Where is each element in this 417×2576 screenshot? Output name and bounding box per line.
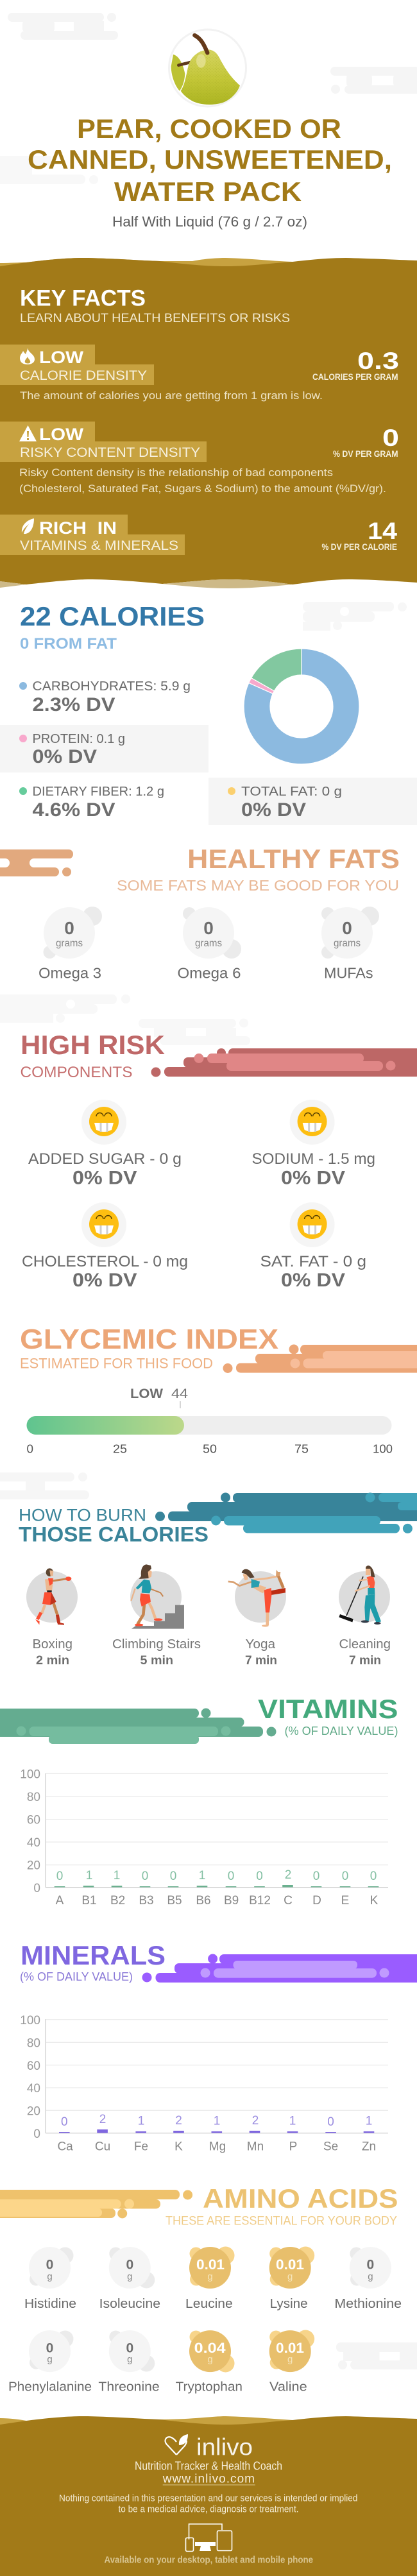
bar chart: minerals: 1 xyxy=(214,2115,220,2128)
icon: woman on stairs xyxy=(131,1564,184,1629)
stat: omega 3 xyxy=(38,907,102,982)
bar chart: vitamins: 40 xyxy=(27,1836,40,1850)
stat: omega 6: grams xyxy=(195,938,222,949)
activity: climbing stairs xyxy=(112,1564,201,1668)
bar chart: minerals: Fe xyxy=(134,2140,148,2154)
item: added sugar: ADDED SUGAR - 0 g xyxy=(28,1150,182,1168)
item: saturated fat xyxy=(260,1202,366,1291)
bar chart: minerals: 2 xyxy=(252,2114,259,2128)
subheading: SOME FATS MAY BE GOOD FOR YOU xyxy=(117,877,399,894)
decorative bars xyxy=(0,849,83,876)
amino: leucine: g xyxy=(207,2271,213,2282)
item: saturated fat: SAT. FAT - 0 g xyxy=(260,1253,366,1270)
stat: mufas: grams xyxy=(334,938,361,949)
bar chart: minerals: Se xyxy=(323,2140,338,2154)
activity: yoga: Yoga xyxy=(245,1637,276,1651)
text: calorie density note: The amount of calories you are getting from 1 gram is low. xyxy=(20,390,323,402)
bar chart: vitamins: 1 xyxy=(114,1869,120,1882)
activity: cleaning: Cleaning xyxy=(339,1637,391,1651)
panel: footer xyxy=(0,2416,417,2576)
panel: calories xyxy=(0,601,417,825)
gauge scale: 50 xyxy=(203,1442,217,1455)
icon: leaf xyxy=(22,518,34,534)
amino: lysine: g xyxy=(287,2271,293,2282)
bar chart: minerals: 40 xyxy=(27,2082,40,2095)
bar chart: vitamins: E xyxy=(341,1894,349,1907)
panel: vitamins xyxy=(0,1694,398,1907)
stat: mufas: MUFAs xyxy=(324,965,373,982)
amino: leucine: 0.01 xyxy=(196,2256,225,2273)
legend: carbohydrates xyxy=(19,679,191,715)
item: saturated fat: 0% DV xyxy=(281,1270,345,1291)
value: calories per gram xyxy=(312,348,399,382)
gauge marker: low 44: LOW xyxy=(130,1386,163,1401)
amino: leucine xyxy=(185,2247,235,2311)
amino: phenylalanine: g xyxy=(47,2354,53,2365)
bar chart: vitamins: 0 xyxy=(142,1870,148,1883)
heading: amino acids: AMINO ACIDS xyxy=(203,2183,398,2213)
decorative bars: orange xyxy=(223,1345,417,1373)
item: sodium: SODIUM - 1.5 mg xyxy=(251,1150,375,1168)
stat: mufas xyxy=(321,907,379,982)
amino: histidine: Histidine xyxy=(24,2297,76,2311)
text: risky content note: Risky Content density is the relationship of bad components xyxy=(19,467,333,479)
bar chart: minerals: 20 xyxy=(27,2104,40,2119)
activity: boxing xyxy=(26,1568,78,1668)
tag: low calorie density: LOW xyxy=(39,348,84,367)
item: added sugar: 0% DV xyxy=(72,1168,137,1188)
amino: histidine: g xyxy=(47,2271,53,2282)
item: cholesterol: CHOLESTEROL - 0 mg xyxy=(22,1253,188,1270)
bar chart: vitamins: 0 xyxy=(256,1870,263,1883)
bar chart: vitamins: D xyxy=(312,1894,321,1907)
bar chart: vitamins: 60 xyxy=(27,1814,40,1827)
amino: phenylalanine: 0 xyxy=(46,2341,53,2356)
subheading: (% OF DAILY VALUE) xyxy=(285,1725,398,1737)
amino: threonine xyxy=(98,2330,160,2394)
stat: omega 3: Omega 3 xyxy=(38,965,101,982)
panel: amino acids xyxy=(0,2183,417,2394)
gauge marker: low 44: 44 xyxy=(171,1386,188,1401)
tag: rich in vitamins and minerals: VITAMINS & MINERALS xyxy=(20,538,178,553)
bar chart: minerals: 0 xyxy=(61,2115,68,2129)
amino: tryptophan: Tryptophan xyxy=(176,2380,243,2394)
legend: carbohydrates: 2.3% DV xyxy=(32,694,115,715)
panel: key facts xyxy=(0,258,417,588)
subheading: (% OF DAILY VALUE) xyxy=(20,1970,133,1983)
amino: valine: Valine xyxy=(269,2380,307,2394)
activity: climbing stairs: 5 min xyxy=(140,1654,173,1668)
amino: tryptophan: g xyxy=(207,2354,213,2365)
amino: threonine: g xyxy=(127,2354,132,2365)
bar chart: minerals: Ca xyxy=(57,2140,73,2154)
item: added sugar xyxy=(28,1100,182,1188)
bar chart: minerals: Mn xyxy=(247,2140,264,2154)
bar chart: vitamins xyxy=(20,1768,388,1907)
value: dv per calorie: 14 xyxy=(368,518,397,544)
activity: yoga xyxy=(228,1569,286,1668)
activity: cleaning: 7 min xyxy=(349,1654,381,1668)
gauge scale: 100 xyxy=(373,1442,393,1455)
bar chart: minerals: 80 xyxy=(27,2036,40,2051)
title: CANNED, UNSWEETENED, xyxy=(28,144,392,175)
heading: minerals: MINERALS xyxy=(21,1940,166,1970)
panel: minerals xyxy=(20,1940,417,2154)
stat: omega 6 xyxy=(177,907,241,982)
tag: rich in vitamins and minerals xyxy=(0,515,185,555)
amino: threonine: 0 xyxy=(126,2341,133,2356)
panel: high risk components xyxy=(0,994,417,1291)
legend: total fat: TOTAL FAT: 0 g xyxy=(241,785,342,799)
value: calories per gram: 0.3 xyxy=(357,348,399,374)
text: disclaimer xyxy=(59,2493,358,2515)
bar chart: vitamins: 20 xyxy=(27,1859,40,1873)
amino: isoleucine: g xyxy=(127,2271,132,2282)
bar chart: vitamins: 100 xyxy=(20,1768,40,1781)
bar chart: minerals: 0 xyxy=(33,2128,40,2141)
subheading: from fat: 0 FROM FAT xyxy=(20,635,117,653)
heading: healthy fats: HEALTHY FATS xyxy=(187,844,400,874)
bar chart: vitamins: K xyxy=(370,1894,379,1907)
subtitle: serving size: Half With Liquid (76 g / 2.7 oz) xyxy=(112,214,307,230)
title xyxy=(28,114,392,207)
amino: tryptophan xyxy=(176,2330,243,2394)
donut chart: macronutrients xyxy=(244,649,359,764)
amino: tryptophan: 0.04 xyxy=(194,2340,226,2356)
heading: glycemic index: GLYCEMIC INDEX xyxy=(20,1324,278,1355)
tag: low calorie density: CALORIE DENSITY xyxy=(20,368,147,383)
amino: valine xyxy=(269,2330,314,2394)
heading: those calories: THOSE CALORIES xyxy=(19,1523,208,1546)
icon: boxer xyxy=(35,1568,71,1625)
bar chart: minerals: 2 xyxy=(99,2113,106,2126)
bar chart: vitamins: B1 xyxy=(81,1894,97,1907)
legend: total fat xyxy=(208,778,417,825)
legend: protein: 0% DV xyxy=(32,746,97,767)
link: website: www.inlivo.com xyxy=(162,2473,255,2486)
bar chart: vitamins: C xyxy=(284,1894,293,1907)
amino: histidine xyxy=(24,2247,76,2311)
gauge scale: 25 xyxy=(113,1442,127,1455)
legend: dietary fiber xyxy=(19,785,164,821)
bar chart: vitamins: B5 xyxy=(167,1894,182,1907)
subheading: ESTIMATED FOR THIS FOOD xyxy=(20,1355,213,1372)
legend: protein xyxy=(0,725,208,772)
title: PEAR, COOKED OR xyxy=(77,114,341,144)
bar chart: minerals: K xyxy=(174,2140,183,2154)
icon: warning triangle xyxy=(19,425,37,441)
decorative bars: red xyxy=(151,1048,417,1077)
tag: low calorie density xyxy=(0,345,154,385)
gauge scale: 75 xyxy=(294,1442,309,1455)
stat: omega 3: 0 xyxy=(64,918,74,938)
text: tagline: Nutrition Tracker & Health Coach xyxy=(135,2460,282,2473)
icon: devices xyxy=(186,2524,232,2551)
amino: leucine: Leucine xyxy=(185,2297,233,2311)
bar chart: vitamins: 0 xyxy=(228,1870,234,1883)
bar chart: minerals: 1 xyxy=(366,2115,372,2128)
tag: low risky content density: LOW xyxy=(39,425,84,444)
amino: methionine: 0 xyxy=(367,2257,374,2272)
amino: isoleucine xyxy=(99,2247,160,2311)
bar chart: vitamins: 1 xyxy=(199,1869,205,1882)
title: WATER PACK xyxy=(114,176,302,207)
heading: vitamins: VITAMINS xyxy=(258,1694,398,1724)
decorative bars: green xyxy=(0,1708,276,1737)
legend: carbohydrates: CARBOHYDRATES: 5.9 g xyxy=(32,679,191,694)
legend: total fat: 0% DV xyxy=(241,799,306,821)
stat: omega 6: 0 xyxy=(203,918,214,938)
heading: 22 calories: 22 CALORIES xyxy=(20,601,205,631)
bar chart: vitamins: 0 xyxy=(56,1870,63,1883)
amino: methionine xyxy=(334,2247,402,2311)
decorative cloud xyxy=(0,1472,89,1499)
amino: phenylalanine: Phenylalanine xyxy=(8,2380,92,2394)
amino: valine: 0.01 xyxy=(276,2340,304,2356)
bar chart: vitamins: A xyxy=(56,1894,64,1907)
value: dv per gram: 0 xyxy=(382,425,399,451)
bar chart: vitamins: 2 xyxy=(285,1868,291,1882)
bar chart: vitamins: 0 xyxy=(370,1870,377,1883)
stat: mufas: 0 xyxy=(342,918,352,938)
bar chart: vitamins: B6 xyxy=(196,1894,211,1907)
amino: lysine: 0.01 xyxy=(276,2256,304,2273)
icon: yoga pose xyxy=(228,1569,285,1627)
subheading: THESE ARE ESSENTIAL FOR YOUR BODY xyxy=(166,2213,397,2228)
bar chart: vitamins: 80 xyxy=(27,1791,40,1804)
amino: isoleucine: 0 xyxy=(126,2257,133,2272)
logo: inlivo: inlivo xyxy=(196,2434,253,2460)
decorative clouds: header xyxy=(0,13,417,184)
heading: key facts: KEY FACTS xyxy=(20,286,146,311)
activity: yoga: 7 min xyxy=(245,1654,277,1668)
amino: valine: g xyxy=(287,2354,293,2365)
bar chart: vitamins: 0 xyxy=(342,1870,348,1883)
tag: rich in vitamins and minerals: RICH IN xyxy=(39,518,117,538)
stat: omega 6: Omega 6 xyxy=(177,965,241,982)
bar chart: minerals: P xyxy=(289,2140,297,2154)
icon: flame xyxy=(20,348,35,364)
bar chart: minerals: Mg xyxy=(209,2140,226,2154)
amino: threonine: Threonine xyxy=(98,2380,160,2394)
decorative bars: purple xyxy=(142,1954,417,1983)
gauge scale xyxy=(27,1442,393,1455)
bar chart: minerals: 60 xyxy=(27,2060,40,2073)
bar chart: vitamins: 0 xyxy=(170,1870,176,1883)
bar chart: vitamins: 0 xyxy=(313,1870,319,1883)
panel: healthy fats xyxy=(0,844,400,982)
tag: low risky content density xyxy=(0,422,207,462)
amino: methionine: Methionine xyxy=(334,2297,402,2311)
bar chart: minerals: Cu xyxy=(95,2140,110,2154)
gauge marker: low 44 xyxy=(130,1386,188,1408)
amino: methionine: g xyxy=(368,2271,373,2282)
activity: climbing stairs: Climbing Stairs xyxy=(112,1637,201,1651)
amino: histidine: 0 xyxy=(46,2257,53,2272)
bar chart: vitamins: B9 xyxy=(224,1894,239,1907)
heading: high risk: HIGH RISK xyxy=(21,1030,165,1060)
tag: low risky content density: RISKY CONTENT DENSITY xyxy=(20,445,200,460)
bar chart: vitamins: 1 xyxy=(86,1869,92,1882)
legend: dietary fiber: DIETARY FIBER: 1.2 g xyxy=(32,785,164,799)
amino: isoleucine: Isoleucine xyxy=(99,2297,160,2311)
decorative cloud xyxy=(336,2342,417,2369)
legend: dietary fiber: 4.6% DV xyxy=(32,799,115,821)
bar chart: vitamins: B3 xyxy=(139,1894,154,1907)
bar chart: minerals: 1 xyxy=(138,2115,144,2128)
activity: cleaning xyxy=(339,1565,391,1668)
text: availability: Available on your desktop, tablet and mobile phone xyxy=(104,2555,313,2566)
decorative bars: teal xyxy=(155,1492,417,1521)
item: sodium: 0% DV xyxy=(281,1168,345,1188)
panel: glycemic index xyxy=(20,1324,417,1455)
heading: how to burn: HOW TO BURN xyxy=(19,1505,146,1524)
item: cholesterol: 0% DV xyxy=(72,1270,137,1291)
bar chart: minerals xyxy=(20,2014,388,2154)
value: dv per gram: % DV PER GRAM xyxy=(333,448,398,459)
item: sodium xyxy=(251,1100,375,1188)
value: dv per calorie xyxy=(322,518,397,552)
bar chart: minerals: 100 xyxy=(20,2014,40,2027)
decorative cloud xyxy=(303,602,407,631)
activity: boxing: 2 min xyxy=(36,1654,69,1668)
text: risky content note: (Cholesterol, Saturated Fat, Sugars & Sodium) to the amount (%DV/gr). xyxy=(19,483,386,495)
subheading: LEARN ABOUT HEALTH BENEFITS OR RISKS xyxy=(20,312,290,325)
legend: protein: PROTEIN: 0.1 g xyxy=(32,732,125,746)
bar chart: minerals: Zn xyxy=(362,2140,376,2154)
gauge bar xyxy=(27,1416,391,1435)
bar chart: minerals: 2 xyxy=(175,2114,182,2128)
panel: how to burn those calories xyxy=(0,1472,417,1668)
value: dv per gram xyxy=(333,425,399,459)
icon: woman sweeping xyxy=(339,1565,381,1625)
text: risky content note xyxy=(19,467,386,495)
gauge scale: 0 xyxy=(27,1442,33,1455)
text: disclaimer: Nothing contained in this presentation and our services is intended or implied xyxy=(59,2493,358,2504)
value: calories per gram: CALORIES PER GRAM xyxy=(312,371,398,382)
amino: lysine: Lysine xyxy=(270,2297,308,2311)
bar chart: vitamins: B12 xyxy=(249,1894,271,1907)
text: disclaimer: to be a medical advice, diagnosis or treatment. xyxy=(118,2503,299,2515)
decorative bars: gold xyxy=(0,2190,192,2219)
icon: pear photo xyxy=(169,30,246,107)
bar chart: vitamins: 0 xyxy=(33,1882,40,1895)
subheading: components: COMPONENTS xyxy=(21,1064,132,1081)
bar chart: vitamins: B2 xyxy=(110,1894,125,1907)
amino: phenylalanine xyxy=(8,2330,92,2394)
amino: lysine xyxy=(269,2247,314,2311)
item: cholesterol xyxy=(22,1202,188,1291)
stat: omega 3: grams xyxy=(56,938,83,949)
logo: inlivo xyxy=(166,2434,253,2460)
bar chart: minerals: 1 xyxy=(289,2115,296,2128)
value: dv per calorie: % DV PER CALORIE xyxy=(322,542,397,552)
bar chart: minerals: 0 xyxy=(327,2115,334,2129)
decorative clouds xyxy=(0,994,250,1045)
activity: boxing: Boxing xyxy=(32,1637,72,1651)
